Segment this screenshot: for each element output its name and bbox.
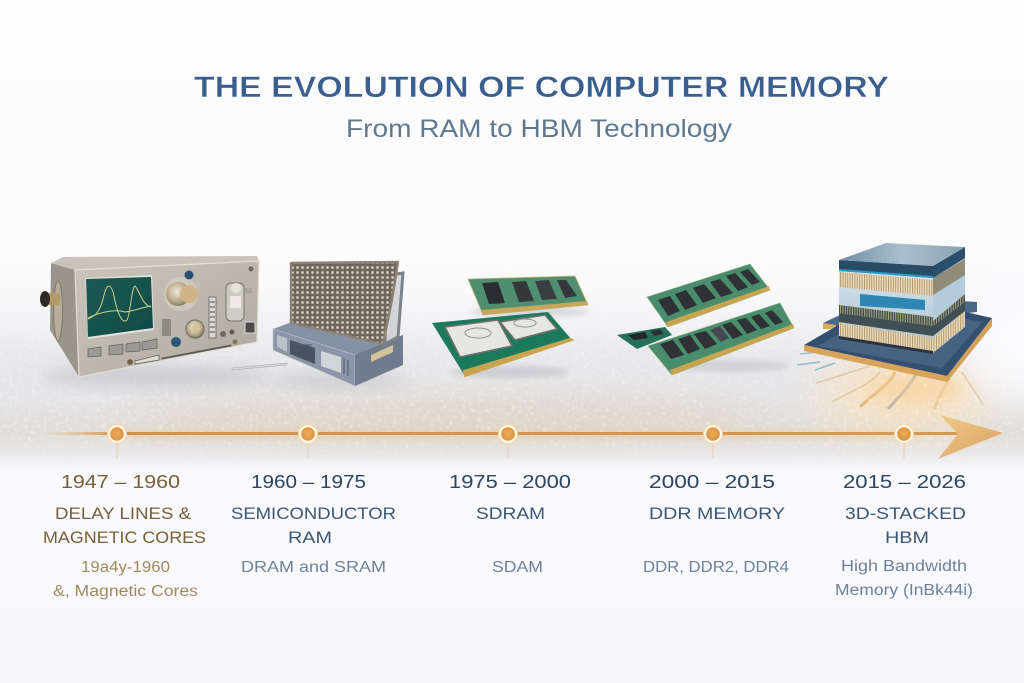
era 1: delay lines and magnetic cores: 1947 – 1960 — [61, 471, 180, 492]
timeline arrowhead — [938, 415, 1003, 459]
era 5: 3D-stacked HBM: High Bandwidth — [841, 558, 967, 575]
side mounted knob — [40, 281, 62, 341]
era 1: delay lines and magnetic cores: &, Magnetic Cores — [53, 583, 198, 600]
SDRAM stick — [468, 276, 590, 317]
era 4: DDR memory — [643, 471, 789, 576]
era 4: DDR memory: DDR MEMORY — [649, 505, 785, 523]
era 5: 3D-stacked HBM: Memory (InBk44i) — [835, 582, 973, 599]
era 1: delay lines and magnetic cores: 19a4y-1960 — [81, 559, 170, 576]
timeline line — [42, 432, 967, 435]
title: THE EVOLUTION OF COMPUTER MEMORY — [194, 71, 889, 104]
era 5: 3D-stacked HBM — [835, 471, 973, 599]
node 2000 — [704, 424, 722, 458]
era 1: delay lines and magnetic cores — [43, 471, 206, 600]
image: magnetic core memory — [232, 262, 410, 388]
era 3: SDRAM: SDRAM — [476, 505, 545, 523]
small DDR module — [617, 327, 672, 349]
glow under package — [865, 373, 965, 403]
era 5: 3D-stacked HBM: HBM — [885, 529, 929, 547]
era 4: DDR memory: 2000 – 2015 — [649, 471, 775, 492]
toggle switch — [226, 283, 252, 321]
circuit traces — [797, 352, 983, 409]
era 4: DDR memory: DDR, DDR2, DDR4 — [643, 559, 789, 576]
button row — [88, 339, 231, 364]
DDR stick upper — [647, 264, 770, 327]
large knob — [164, 277, 198, 311]
era 3: SDRAM: 1975 – 2000 — [449, 471, 571, 492]
era 2: semiconductor RAM: 1960 – 1975 — [251, 471, 366, 492]
image: SDRAM modules — [432, 276, 590, 378]
era 1: delay lines and magnetic cores: DELAY LINES & — [55, 505, 191, 523]
node 1947 — [108, 424, 126, 458]
timeline — [42, 415, 1003, 459]
glowing sparks — [869, 370, 977, 414]
subtitle: From RAM to HBM Technology — [346, 115, 733, 143]
memory stack front — [839, 260, 933, 354]
era 2: semiconductor RAM — [231, 471, 396, 576]
oscilloscope screen — [85, 275, 154, 339]
image: vintage oscilloscope — [40, 256, 270, 386]
era 1: delay lines and magnetic cores: MAGNETIC CORES — [43, 529, 206, 547]
DDR stick lower — [648, 303, 794, 375]
node 1960 — [298, 424, 318, 458]
node 1975 — [498, 424, 518, 458]
image: DDR modules — [617, 264, 794, 375]
memory stack top — [839, 243, 965, 266]
era 2: semiconductor RAM: RAM — [288, 529, 332, 547]
era 5: 3D-stacked HBM: 2015 – 2026 — [843, 471, 966, 492]
timeline glow — [120, 430, 920, 439]
image: 3D-stacked HBM package — [797, 243, 992, 414]
memory stack right side — [933, 247, 965, 353]
small knob — [186, 320, 204, 338]
core wire grid — [291, 262, 398, 344]
era 5: 3D-stacked HBM: 3D-STACKED — [845, 505, 966, 523]
slider and controls — [162, 266, 255, 347]
glittering ground band — [0, 320, 1024, 465]
era 3: SDRAM: SDAM — [492, 559, 543, 576]
core base unit — [273, 322, 403, 386]
core frame — [385, 273, 403, 344]
SDRAM stick with silver chips — [432, 312, 572, 378]
era 2: semiconductor RAM: SEMICONDUCTOR — [231, 505, 396, 523]
substrate — [804, 295, 992, 382]
era 3: SDRAM — [449, 471, 571, 576]
node 2015 — [894, 424, 914, 458]
era 2: semiconductor RAM: DRAM and SRAM — [241, 559, 386, 576]
